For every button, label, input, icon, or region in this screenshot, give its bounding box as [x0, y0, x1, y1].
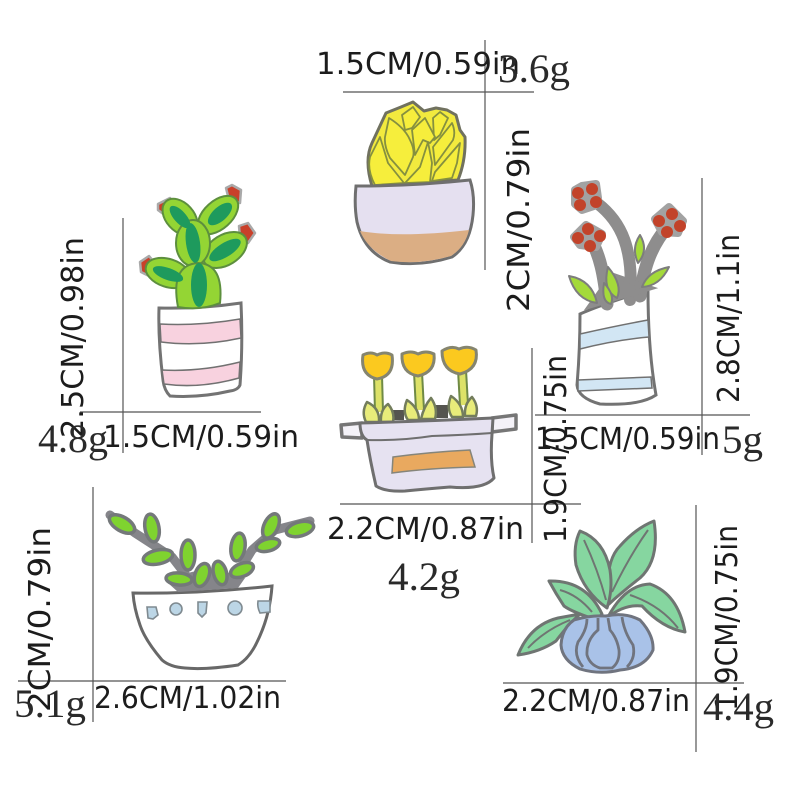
dimension lines: bottom-right pin: [503, 505, 744, 752]
label: center pin width: 2.2CM/0.87in: [327, 512, 524, 547]
label: top pin weight: 3.6g: [498, 46, 570, 91]
label: bottom-right pin weight: 4.4g: [703, 684, 774, 729]
label: top pin height: 2CM/0.79in: [502, 128, 537, 312]
pin: green-leaf plant in blue bulb: [518, 521, 685, 672]
label: bottom-left pin weight: 5.1g: [14, 681, 86, 726]
label: left pin height: 2.5CM/0.98in: [56, 237, 91, 438]
leaf veins: [528, 530, 678, 648]
succulent leaves: [368, 102, 465, 186]
vase: [577, 290, 656, 404]
leaves: [106, 511, 315, 589]
label: right pin weight: 5g: [722, 417, 763, 462]
cactus flowers: [140, 185, 255, 276]
label: top pin width: 1.5CM/0.59in: [316, 47, 520, 82]
pin: yellow succulent in lavender pot: [355, 102, 474, 264]
cactus segments: [142, 189, 253, 308]
leaves: [569, 235, 669, 304]
cactus pot: [159, 303, 242, 396]
dimension lines: bottom-left pin: [18, 487, 286, 722]
label: left pin weight: 4.8g: [38, 416, 108, 461]
branches: [110, 515, 310, 583]
tan pot base: [360, 230, 469, 262]
dimension lines: center pin: [340, 348, 581, 543]
dimension lines: left pin: [80, 218, 261, 453]
label: bottom-right pin height: 1.9CM/0.75in: [710, 525, 745, 711]
label: bottom-right pin width: 2.2CM/0.87in: [502, 684, 690, 719]
pin: green cactus in pink-striped pot: [140, 185, 255, 396]
lavender pot: [355, 180, 474, 264]
blue bulb: [561, 615, 653, 672]
stems: [590, 203, 668, 306]
pin: leafy branches in white bowl with blue dots: [106, 511, 315, 669]
planter handles: [341, 423, 362, 438]
pin: three yellow tulips in lavender planter: [341, 347, 516, 491]
bulb ribs: [576, 617, 634, 668]
dimension lines: top pin: [343, 40, 534, 270]
dimension lines: right pin: [535, 178, 750, 455]
planter body: [360, 418, 494, 491]
bowl dots: [147, 601, 270, 619]
label: bottom-left pin height: 2CM/0.79in: [23, 527, 58, 712]
label: right pin width: 1.5CM/0.59in: [535, 422, 720, 457]
tulip heads: [363, 347, 476, 379]
orange planter label: [392, 450, 475, 473]
plant leaves: [518, 521, 685, 655]
pin: red flowers in blue-striped vase: [569, 183, 686, 404]
label: left pin width: 1.5CM/0.59in: [103, 420, 299, 455]
label: center pin weight: 4.2g: [388, 554, 460, 599]
label: bottom-left pin width: 2.6CM/1.02in: [94, 681, 281, 716]
flower heads: [572, 183, 686, 252]
label: center pin height: 1.9CM/0.75in: [539, 355, 574, 543]
label: right pin height: 2.8CM/1.1in: [712, 234, 747, 403]
tulip stems and leaves: [364, 370, 477, 422]
cactus dark stripes: [151, 199, 244, 307]
bowl: [133, 586, 272, 669]
